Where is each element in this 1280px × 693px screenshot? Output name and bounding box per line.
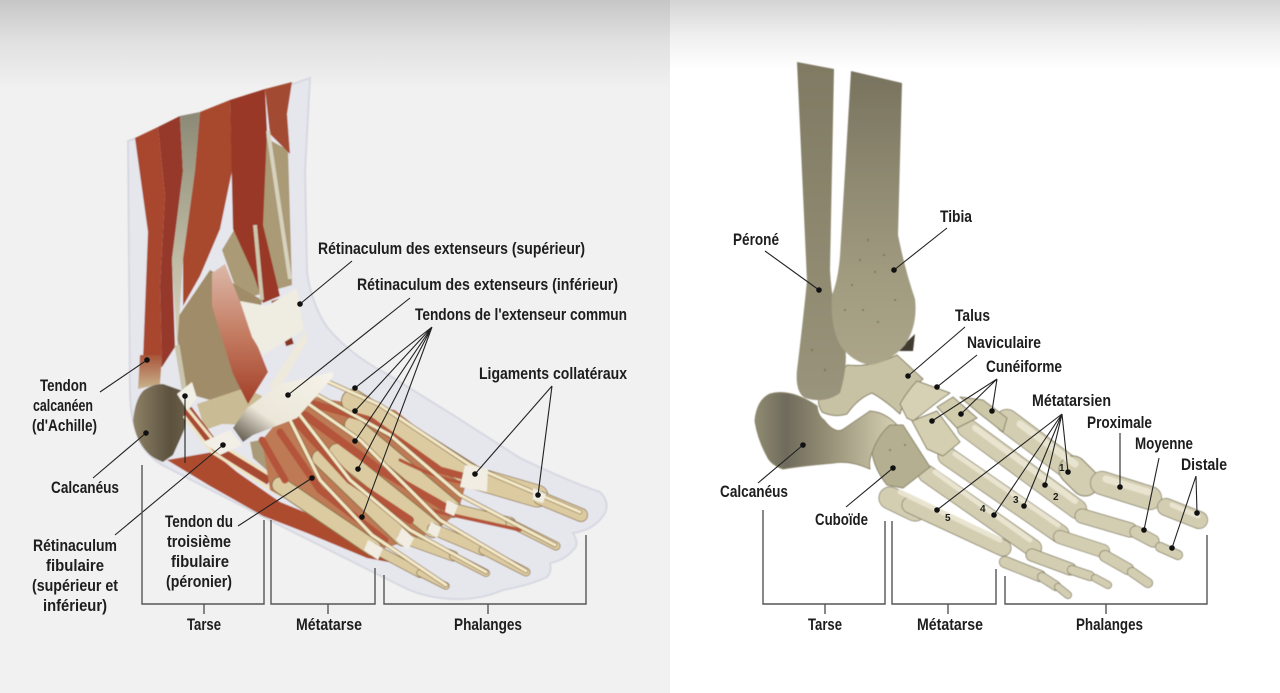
- toe ray 4: [927, 472, 1108, 585]
- fibular retinaculum patches: [177, 382, 242, 455]
- label: Naviculaire: Naviculaire: [967, 334, 1041, 352]
- foot soft-tissue silhouette: [128, 78, 607, 599]
- abductor muscle: [167, 452, 393, 563]
- bracket: Phalanges right: [1005, 535, 1207, 634]
- label: Cunéiforme: Cunéiforme: [986, 358, 1062, 376]
- label: Rétinaculum des extenseurs (inférieur): Rétinaculum des extenseurs (inférieur): [357, 276, 618, 294]
- label: Rétinaculum fibulaire: inférieur): [43, 597, 107, 615]
- label: Métatarsien: [934, 392, 1111, 518]
- label: Tendon calcanéen (d'Achille): (d'Achille): [32, 417, 97, 435]
- label: Calcanéus right: Calcanéus: [720, 483, 788, 501]
- label: Tendon du troisième fibulaire: troisième: [167, 533, 231, 551]
- label: Cunéiforme: [929, 358, 1062, 424]
- label: Métatarsien: Métatarsien: [1032, 392, 1111, 410]
- panel: left background: [0, 0, 670, 693]
- bracket: Tarse left: Tarse: [187, 616, 221, 634]
- number: 3: 3: [1013, 495, 1019, 506]
- cuboid: [872, 425, 930, 488]
- label: Tendons de l'extenseur commun: Tendons de l'extenseur commun: [415, 306, 627, 324]
- white joint capsules: [364, 465, 546, 560]
- label: Proximale: [1087, 414, 1152, 490]
- superior extensor retinaculum: [240, 288, 304, 355]
- extensor tendons: [285, 378, 580, 585]
- label: Talus: Talus: [955, 307, 990, 325]
- navicular: [900, 381, 950, 421]
- bracket: Phalanges right: Phalanges: [1076, 616, 1143, 634]
- label: Rétinaculum fibulaire: Rétinaculum: [33, 537, 117, 555]
- toe ray 3: [947, 454, 1148, 583]
- bracket: Tarse right: Tarse: [808, 616, 842, 634]
- toe 5 bones: [280, 485, 446, 586]
- toe 2 bones: [353, 425, 556, 546]
- label: Péroné: [733, 231, 822, 293]
- label: Péroné: Péroné: [733, 231, 779, 249]
- bracket: Métatarse left: Métatarse: [296, 616, 362, 634]
- label: Tendon du troisième fibulaire: (péronier): [166, 573, 232, 591]
- toe ray 2: [967, 428, 1178, 555]
- bracket: Métatarse right: [892, 521, 996, 634]
- bone speckle: [811, 239, 906, 451]
- forefoot fill: [262, 395, 470, 550]
- label: Tibia: [891, 208, 973, 273]
- illustration: foot skeleton: [755, 62, 1199, 595]
- bracket: Tarse left: [142, 465, 264, 634]
- intermediate cuneiform: [937, 397, 977, 428]
- calf muscles: [135, 82, 292, 394]
- calcaneus: [755, 392, 897, 469]
- label: Tendons de l'extenseur commun: [352, 306, 627, 520]
- label: Tendon calcanéen (d'Achille): calcanéen: [33, 397, 93, 415]
- label: Moyenne: Moyenne: [1135, 435, 1193, 453]
- toe 1 bones: [353, 401, 581, 515]
- number: 4: 4: [980, 504, 986, 515]
- label: Rétinaculum fibulaire: fibulaire: [46, 557, 104, 575]
- label: Ligaments collatéraux: Ligaments collatéraux: [479, 365, 628, 383]
- number: 2: 2: [1053, 492, 1059, 503]
- toe 3 bones: [337, 452, 526, 572]
- fibula: [797, 62, 846, 400]
- bracket: Phalanges left: [384, 535, 586, 634]
- tibialis anterior muscle: [212, 264, 268, 404]
- label: Tendon du troisième fibulaire: fibulaire: [171, 553, 229, 571]
- label: Rétinaculum des extenseurs (supérieur): Rétinaculum des extenseurs (supérieur): [318, 240, 585, 258]
- peroneal tendons: [184, 408, 280, 495]
- bracket: Tarse right: [763, 510, 885, 634]
- bracket: Métatarse left: [271, 520, 375, 634]
- illustration: foot muscles and tendons: [128, 78, 607, 599]
- label: Cuboïde: Cuboïde: [815, 511, 868, 529]
- label: Moyenne: [1135, 435, 1193, 533]
- label: Distale: [1169, 456, 1227, 551]
- posterior tibial malleolus shadow: [897, 334, 915, 351]
- panel: right background: [670, 0, 1280, 693]
- label: Calcanéus right: [720, 442, 806, 501]
- label: Tendon du troisième fibulaire: [165, 475, 315, 591]
- label: Rétinaculum fibulaire: (supérieur et: [32, 577, 118, 595]
- bracket: Métatarse right: Métatarse: [917, 616, 983, 634]
- calcaneus: [133, 384, 187, 462]
- toe 4 bones: [320, 458, 486, 573]
- lateral cuneiform: [912, 411, 960, 456]
- midfoot cuboid bone: [250, 440, 300, 482]
- number: 1: 1: [1059, 463, 1065, 474]
- inferior extensor retinaculum: [233, 330, 333, 442]
- label: Calcanéus left: [51, 430, 149, 497]
- label: Ligaments collatéraux: [472, 365, 628, 498]
- label: Cuboïde: [815, 465, 896, 529]
- label: Tendon calcanéen (d'Achille): [32, 357, 150, 435]
- label: Rétinaculum des extenseurs (inférieur): [285, 276, 618, 398]
- toe ray 1: [1007, 421, 1199, 520]
- talus: [818, 355, 923, 416]
- number: 5: 5: [945, 513, 951, 524]
- forefoot red muscle bellies: [262, 400, 520, 540]
- label: Rétinaculum fibulaire: [32, 393, 226, 615]
- label: Rétinaculum des extenseurs (supérieur): [297, 240, 585, 307]
- bracket: Phalanges left: Phalanges: [454, 616, 522, 634]
- label: Tibia: Tibia: [940, 208, 973, 226]
- label: Tendon du troisième fibulaire: Tendon du: [165, 513, 233, 531]
- label: Talus: [905, 307, 990, 379]
- toe ray 5: [890, 492, 1068, 595]
- medial cuneiform: [960, 397, 1007, 432]
- label: Calcanéus left: Calcanéus: [51, 479, 119, 497]
- label: Tendon calcanéen (d'Achille): Tendon: [40, 377, 87, 395]
- tibia: [832, 71, 916, 365]
- label: Proximale: Proximale: [1087, 414, 1152, 432]
- deep tan bone behind the tendons: [176, 138, 292, 430]
- label: Naviculaire: [934, 334, 1041, 390]
- label: Distale: Distale: [1181, 456, 1227, 474]
